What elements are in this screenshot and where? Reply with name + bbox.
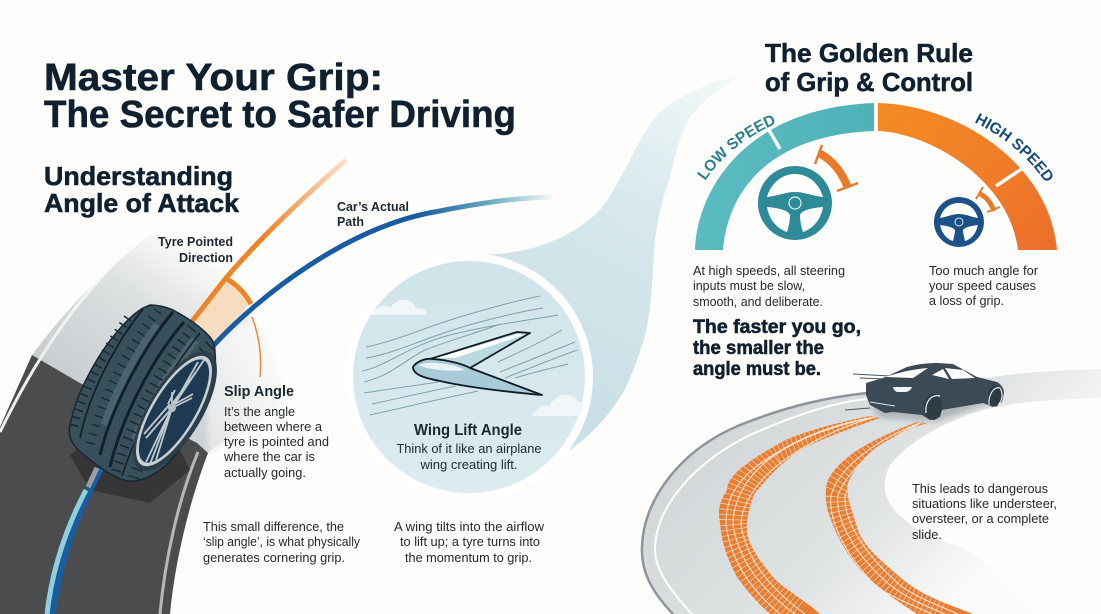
wing caption line 1: Think of it like an airplane [396, 441, 542, 456]
airflow lines [362, 296, 578, 415]
heading line 1: Understanding [44, 161, 233, 191]
spokes [144, 360, 204, 464]
sidewall [117, 339, 233, 483]
cloud right [532, 395, 583, 416]
slip angle line 5: actually going. [224, 465, 306, 480]
speed gauge [695, 103, 1057, 250]
heading line 1: The Golden Rule [765, 38, 973, 68]
tail light [893, 387, 912, 392]
pale shoulder right of tyre [205, 320, 290, 453]
tread highlight [105, 325, 158, 425]
rear wing highlight [436, 334, 524, 358]
swoosh connecting wing circle to gauge [470, 75, 745, 450]
wedge fill [192, 279, 250, 344]
slip angle line 3: tyre is pointed and [224, 434, 329, 449]
arc cap end [987, 207, 1000, 212]
rim [122, 345, 226, 477]
high steering angle arc [980, 194, 994, 211]
label line 2: Direction [179, 251, 233, 265]
road surface [642, 367, 1101, 614]
small difference text [203, 519, 360, 565]
motion lines [845, 374, 890, 410]
slip angle leader arc [252, 317, 261, 377]
front wheel [988, 386, 1002, 406]
sky [353, 261, 585, 493]
skid base [826, 422, 973, 614]
heading line 2: Angle of Attack [44, 188, 240, 218]
wing caption line 2: wing creating lift. [419, 457, 518, 472]
skid tread blocks [733, 417, 875, 614]
line 1: The faster you go, [693, 317, 861, 338]
arc cap start [815, 145, 822, 164]
wheel hub [955, 218, 963, 226]
far road white line [985, 368, 1101, 377]
rear wing panel [430, 332, 530, 368]
hub [168, 404, 176, 412]
wing body [413, 359, 542, 395]
skid mark left [718, 416, 880, 614]
high speed label path [974, 122, 1048, 186]
rear wheel [924, 394, 942, 420]
skid base [718, 416, 880, 614]
road grey outer edge [642, 393, 867, 614]
road inner edge line [160, 452, 198, 614]
wedge arc [227, 279, 251, 304]
line 3: a loss of grip. [929, 293, 1004, 308]
skid tread blocks [838, 422, 945, 614]
high speed caption [929, 263, 1039, 308]
light path lower segment [47, 490, 86, 614]
line 2: the smaller the [693, 338, 824, 359]
heading line 2: of Grip & Control [765, 67, 973, 97]
line 3: smooth, and deliberate. [693, 294, 823, 309]
tyre body [69, 305, 215, 481]
road shoulder [32, 235, 262, 453]
line 1: At high speeds, all steering [693, 263, 845, 278]
skid channels [726, 417, 875, 614]
line 1: This leads to dangerous [912, 481, 1048, 496]
wing vs tyre text [394, 519, 545, 565]
line 4: slide. [912, 527, 942, 542]
title line 1: Master Your Grip: [44, 57, 383, 99]
skid mark right [826, 422, 973, 614]
wheel body with openings [934, 197, 984, 247]
label: car's actual path [337, 200, 409, 229]
wing lift circle [345, 253, 593, 501]
asphalt [0, 355, 208, 614]
line 2: your speed causes [929, 278, 1036, 293]
road outer edge line [0, 237, 143, 432]
skid channels [831, 422, 958, 614]
arc cap end [837, 183, 858, 191]
label: tyre pointed direction [158, 235, 233, 265]
line 1: Too much angle for [929, 263, 1039, 278]
low speed caption [693, 263, 845, 309]
high speed steering wheel [934, 187, 1000, 247]
slip angle text block [223, 383, 329, 480]
car path lower segment [52, 468, 101, 614]
tread blocks [73, 311, 210, 478]
title line 2: The Secret to Safer Driving [44, 94, 516, 136]
slip angle wedge [190, 160, 556, 377]
low speed label: LOW SPEED [697, 116, 774, 180]
grey path segment [88, 468, 97, 487]
tyre [69, 305, 233, 483]
label line 2: Path [337, 215, 364, 229]
line 2: inputs must be slow, [693, 278, 805, 293]
wing highlight [418, 363, 465, 371]
low band tick [769, 130, 780, 149]
line 3: generates cornering grip. [203, 550, 345, 565]
label line 1: Car’s Actual [337, 200, 409, 214]
slip angle title: Slip Angle [224, 383, 294, 400]
label line 1: Tyre Pointed [158, 235, 233, 249]
front wheel arc [989, 388, 1002, 405]
arc cap start [976, 187, 983, 199]
car actual path line [213, 197, 556, 346]
high speed label: HIGH SPEED [975, 113, 1052, 181]
line 2: situations like understeer, [912, 496, 1057, 511]
line 3: the momentum to grip. [405, 550, 532, 565]
left road illustration [0, 235, 290, 614]
line 2: to lift up; a tyre turns into [400, 534, 540, 549]
cloud left [370, 300, 427, 315]
shoulder highlight [135, 340, 195, 440]
high speed band [878, 103, 1057, 250]
wheel body with openings [758, 166, 832, 240]
rear wheel arc [926, 396, 940, 413]
low steering angle arc [819, 153, 848, 188]
low speed band [695, 103, 874, 250]
road white line [655, 399, 867, 614]
line 2: ‘slip angle’, is what physically [203, 534, 360, 549]
rear window [885, 368, 928, 378]
slip angle line 2: between where a [224, 419, 323, 434]
tyre shadow [70, 430, 190, 503]
low speed steering wheel [758, 145, 858, 240]
main title [44, 57, 516, 136]
car shadow [870, 398, 1005, 422]
line 3: angle must be. [693, 359, 821, 380]
rim inner [126, 350, 222, 472]
front window [945, 368, 975, 379]
circle backing [345, 253, 593, 501]
consequences text [912, 481, 1057, 542]
slip angle line 4: where the car is [223, 449, 315, 464]
tyre pointed direction line [190, 160, 346, 324]
key rule statement [693, 317, 861, 380]
line 1: This small difference, the [203, 519, 344, 534]
curved road with skid marks [642, 367, 1101, 614]
golden rule heading [765, 38, 973, 97]
wing shape [413, 332, 542, 395]
car silhouette [845, 363, 1005, 422]
wheel hub [789, 197, 801, 209]
middle window [932, 369, 949, 379]
slip angle line 1: It’s the angle [224, 404, 295, 419]
line 3: oversteer, or a complete [912, 511, 1049, 526]
high band tick [996, 166, 1026, 186]
section heading: angle of attack [44, 161, 240, 218]
rear trim line [870, 402, 895, 406]
line 1: A wing tilts into the airflow [394, 519, 545, 534]
wing title: Wing Lift Angle [414, 422, 522, 439]
tread grooves [80, 309, 200, 476]
low speed label path [705, 123, 778, 181]
car body [866, 363, 1004, 420]
